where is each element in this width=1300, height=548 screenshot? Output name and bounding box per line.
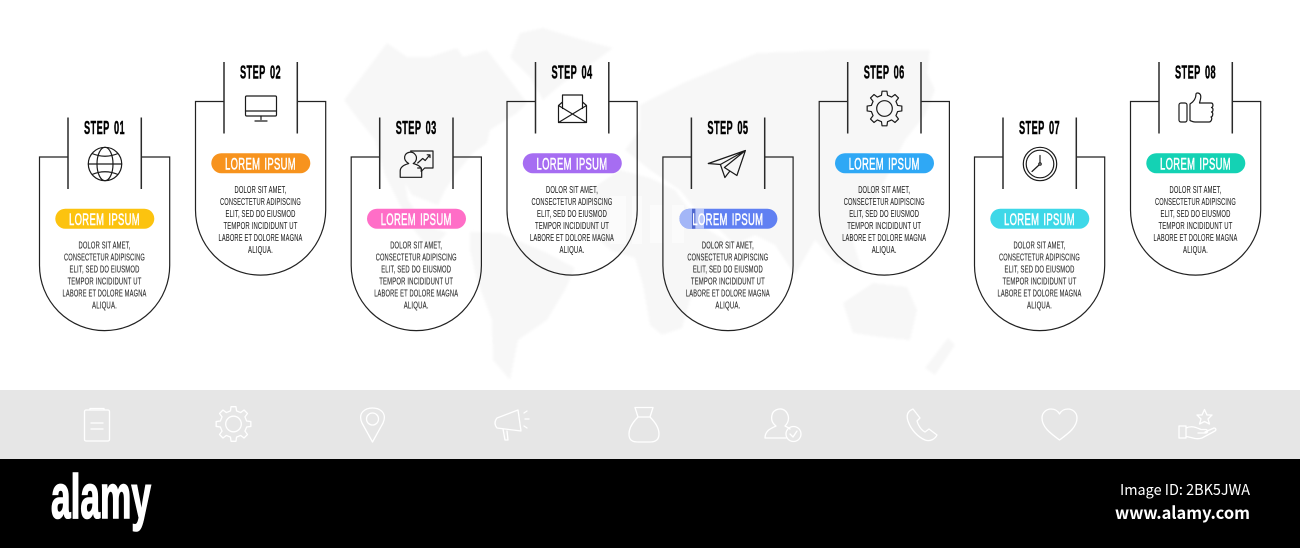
body text: TEMPOR INCIDIDUNT UT [68,277,142,288]
body text: DOLOR SIT AMET, [390,241,442,252]
step 07 [974,117,1105,331]
pill: lorem ipsum: LOREM IPSUM [536,154,608,174]
body text [530,185,614,256]
step 04 [507,62,637,275]
body text [218,185,303,256]
body text: CONSECTETUR ADIPISCING [844,197,925,208]
icon: presenter with chart [400,151,433,177]
body text: LABORE ET DOLORE MAGNA [686,289,770,300]
body text: LABORE ET DOLORE MAGNA [1154,233,1238,244]
pill: lorem ipsum: LOREM IPSUM [225,154,296,174]
body text: DOLOR SIT AMET, [1170,185,1222,196]
body text: ELIT, SED DO EIUSMOD [537,209,607,220]
body text: LABORE ET DOLORE MAGNA [530,233,614,244]
tab lines [1003,118,1076,189]
body text: ELIT, SED DO EIUSMOD [226,209,296,220]
tab lines [380,118,453,189]
tab lines [536,62,609,134]
tab lines [1159,62,1232,134]
tab lines [68,118,141,189]
icon: megaphone [495,410,529,440]
body text: TEMPOR INCIDIDUNT UT [691,277,765,288]
body text: TEMPOR INCIDIDUNT UT [1158,221,1232,232]
pill: lorem ipsum: LOREM IPSUM [1004,210,1075,229]
icon: clipboard [84,408,110,441]
icon: globe [88,147,122,181]
pill: lorem ipsum [1146,153,1245,174]
icon: clock [1023,147,1057,181]
body text: CONSECTETUR ADIPISCING [1155,197,1236,208]
card outline [663,157,793,331]
body text: DOLOR SIT AMET, [702,241,754,252]
body text: DOLOR SIT AMET, [234,185,286,196]
card outline [40,157,170,331]
card outline [196,102,326,275]
body text [62,241,147,312]
pill: lorem ipsum [990,209,1089,229]
body text: CONSECTETUR ADIPISCING [532,197,612,208]
footer bar [0,459,1300,548]
icon: telephone [907,409,937,441]
step 05: STEP 05 [707,117,748,138]
body text [374,241,458,312]
body text: ALIQUA. [715,301,740,312]
watermark haze [610,196,684,244]
body text: ALIQUA. [1027,301,1052,312]
icon: paper plane [708,150,745,178]
body text: ALIQUA. [248,245,273,256]
body text: ALIQUA. [872,245,897,256]
body text: ALIQUA. [92,301,117,312]
card outline [351,157,481,331]
body text: CONSECTETUR ADIPISCING [687,253,768,264]
step 02: STEP 02 [240,62,281,82]
tab lines [224,62,297,134]
step 03 [351,117,481,331]
body text: ELIT, SED DO EIUSMOD [70,265,140,276]
tab lines [691,118,765,189]
body text: DOLOR SIT AMET, [1014,241,1066,252]
pill: lorem ipsum [679,209,777,229]
icon: gear [216,407,251,441]
pill: lorem ipsum [367,209,466,229]
pill: lorem ipsum: LOREM IPSUM [849,154,920,174]
icon: heart [1042,409,1077,440]
pill: lorem ipsum [55,209,154,229]
body text [1154,185,1238,256]
icon: hand with star [1179,410,1216,439]
world map [344,28,955,380]
body text: CONSECTETUR ADIPISCING [999,253,1080,264]
step 02 [196,62,326,275]
body text: LABORE ET DOLORE MAGNA [62,289,147,300]
step 01 [40,117,170,331]
body text: CONSECTETUR ADIPISCING [64,253,145,264]
step 08 [1130,62,1261,275]
body text: TEMPOR INCIDIDUNT UT [1002,277,1076,288]
body text: ELIT, SED DO EIUSMOD [849,209,919,220]
body text: TEMPOR INCIDIDUNT UT [224,221,298,232]
icon: monitor [246,96,276,121]
body text: TEMPOR INCIDIDUNT UT [847,221,921,232]
step 05 [663,117,793,331]
body text [686,241,770,312]
icon: money bag [629,408,659,442]
step 01: STEP 01 [84,117,125,138]
icon: gear [867,91,902,126]
body text: DOLOR SIT AMET, [858,185,910,196]
body text: ALIQUA. [560,245,584,256]
body text: DOLOR SIT AMET, [78,241,130,252]
body text: LABORE ET DOLORE MAGNA [998,289,1082,300]
alamy logo: alamy [51,463,151,532]
pill: lorem ipsum [523,153,622,174]
pill: lorem ipsum [835,153,934,174]
body text: ELIT, SED DO EIUSMOD [1004,265,1074,276]
step 08: STEP 08 [1175,62,1216,82]
body text [998,241,1082,312]
step 04: STEP 04 [552,62,592,82]
body text: ELIT, SED DO EIUSMOD [1160,209,1230,220]
pill: lorem ipsum [211,153,310,174]
step 06 [819,62,949,275]
step 03: STEP 03 [396,117,437,138]
tab lines [848,62,921,134]
body text: CONSECTETUR ADIPISCING [376,253,457,264]
body text: ELIT, SED DO EIUSMOD [381,265,451,276]
body text: LABORE ET DOLORE MAGNA [842,233,926,244]
body text [842,185,926,256]
body text: LABORE ET DOLORE MAGNA [218,233,303,244]
background [0,0,1300,390]
card outline [1130,102,1261,275]
card outline [819,102,949,275]
icon: open envelope [558,95,586,122]
body text: TEMPOR INCIDIDUNT UT [535,221,609,232]
panel: grey icon band [0,390,1300,459]
step 07: STEP 07 [1019,117,1060,138]
step 06: STEP 06 [864,62,905,82]
body text: ALIQUA. [1183,245,1208,256]
icon: user with check [765,409,801,442]
card outline [974,157,1105,331]
website: www.alamy.com [1115,499,1250,524]
pill: lorem ipsum: LOREM IPSUM [69,210,140,229]
pill: lorem ipsum: LOREM IPSUM [692,210,763,229]
pill: lorem ipsum: LOREM IPSUM [381,210,452,229]
pill: lorem ipsum: LOREM IPSUM [1160,154,1231,174]
card outline [507,102,637,275]
image id: Image ID: 2BK5JWA [1120,479,1251,500]
body text: ALIQUA. [404,301,429,312]
body text: LABORE ET DOLORE MAGNA [374,289,458,300]
body text: DOLOR SIT AMET, [546,185,598,196]
body text: ELIT, SED DO EIUSMOD [693,265,763,276]
body text: CONSECTETUR ADIPISCING [220,197,301,208]
icon: thumbs up [1179,93,1213,122]
body text: TEMPOR INCIDIDUNT UT [379,277,453,288]
icon: location pin [361,408,384,442]
